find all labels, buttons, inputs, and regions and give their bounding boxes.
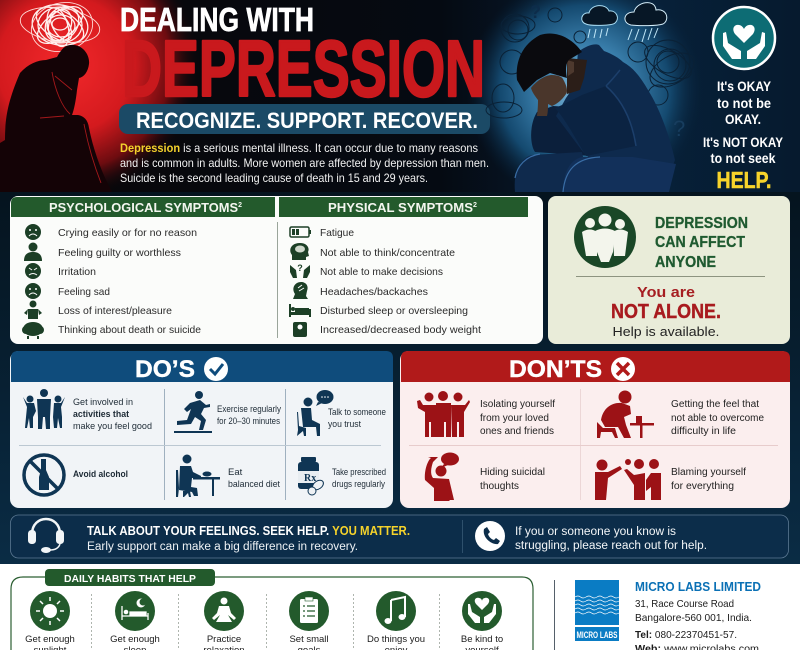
don't: isolating: Isolating yourself (480, 399, 555, 410)
hero banner (0, 0, 800, 193)
list: physical symptoms: Not able to make decisions (320, 266, 443, 278)
do: exercise: Exercise regularly (217, 404, 281, 414)
habit: kind to yourself (461, 591, 503, 650)
don't: isolating: ones and friends (480, 426, 554, 437)
illustration: man holding head with thought scribbles (486, 2, 700, 192)
heading: do's: DO’S (135, 356, 195, 383)
don't: hiding thoughts: Hiding suicidal (480, 467, 545, 478)
icon: bed (289, 304, 311, 317)
panel: daily habits (11, 569, 533, 650)
don't: blaming yourself (595, 459, 746, 500)
list: physical symptoms: Not able to think/concentrate (320, 247, 455, 259)
do: prescribed drugs: Take prescribed (332, 467, 386, 477)
do: activities (23, 389, 152, 432)
message: it's okay: to not seek (710, 150, 776, 166)
man's legs (515, 152, 590, 192)
icon: guilty person (24, 242, 42, 261)
illustration: man holding head with thought scribbles: ? (530, 2, 541, 22)
man's face (567, 58, 587, 94)
text: reach out: If you or someone you know is (515, 526, 676, 538)
heading: don'ts: DON’TS (509, 356, 602, 383)
panel: can affect anyone (548, 196, 790, 344)
man's hair (517, 34, 582, 92)
footer background (0, 564, 800, 650)
list: psychological symptoms: Feeling sad (58, 286, 110, 298)
text: you are not alone: Help is available. (612, 324, 720, 339)
list: physical symptoms: Fatigue (320, 227, 354, 239)
message: it's okay: HELP. (716, 167, 772, 193)
text: you are not alone (611, 284, 721, 339)
heading: physical symptoms (279, 197, 528, 217)
heading: psychological symptoms: PSYCHOLOGICAL SYMPTOMS (49, 200, 240, 215)
man's far arm (531, 106, 592, 156)
heading: psychological symptoms (11, 197, 275, 217)
heading: psychological symptoms: 2 (238, 202, 242, 209)
heading: do's (11, 351, 393, 383)
habit: relaxation: Practice (207, 634, 241, 645)
message: it's okay: It's OKAY (717, 78, 772, 94)
heading: daily habits (45, 569, 215, 586)
cloud left (582, 6, 617, 25)
heading: don'ts (401, 351, 790, 383)
text: seek help: Early support can make a big difference in recovery. (87, 541, 358, 553)
panel: do's (10, 351, 393, 508)
icon: weighing scale (293, 322, 307, 337)
contact details: MICRO LABS LIMITED (635, 580, 761, 594)
do: exercise (174, 391, 281, 433)
do: prescribed drugs: Rx (304, 473, 316, 484)
icon: headache (293, 282, 308, 299)
message: it's okay (703, 78, 784, 193)
icon: hands with question mark: ? (297, 263, 303, 273)
habit: enjoy: Do things you (367, 634, 425, 645)
panel: don'ts (400, 351, 790, 508)
don't: isolating (417, 391, 555, 437)
do: exercise: for 20–30 minutes (217, 416, 280, 426)
text: seek help (87, 524, 410, 553)
list: physical symptoms: Increased/decreased body weight (320, 324, 481, 336)
illustration: man holding head with thought scribbles: ? (673, 116, 685, 141)
title: DEALING WITH (120, 1, 314, 38)
habit: sunlight: Get enough (25, 634, 75, 645)
list: physical symptoms: Disturbed sleep or oversleeping (320, 305, 468, 317)
do: talk to someone: Talk to someone (328, 407, 386, 417)
do: activities: Get involved in (73, 397, 133, 408)
icon: crying face (25, 224, 41, 240)
don't: hiding thoughts: thoughts (480, 481, 519, 492)
icon: irritated face (25, 263, 41, 279)
message: it's okay: OKAY. (725, 111, 761, 127)
icon: dark cloud (22, 322, 44, 339)
don't: overcome difficulty: difficulty in life (671, 426, 736, 437)
icon: group of people (574, 206, 636, 268)
habit: sunlight (25, 591, 75, 650)
do: activities: activities that (73, 409, 130, 420)
list: physical symptoms (289, 227, 481, 337)
do: avoid alcohol (24, 455, 128, 495)
list: psychological symptoms: Loss of interest/pleasure (58, 305, 172, 317)
icon: hands with question mark (290, 263, 310, 278)
message: it's okay: to not be (717, 95, 771, 111)
cloud right (625, 3, 667, 26)
habit: enjoy (367, 591, 425, 650)
do: activities: make you feel good (73, 421, 152, 432)
do: prescribed drugs: drugs regularly (332, 479, 385, 489)
list: psychological symptoms: Irritation (58, 266, 96, 278)
icon: sad face (25, 283, 41, 299)
habit: relaxation (203, 591, 245, 650)
don't: overcome difficulty: Getting the feel that (671, 399, 759, 410)
heading: daily habits: DAILY HABITS THAT HELP (64, 573, 196, 585)
text: depression can affect anyone (655, 215, 748, 271)
heading: physical symptoms: PHYSICAL SYMPTOMS (328, 200, 471, 215)
habit: kind to yourself: Be kind to (461, 634, 503, 645)
intro text: and is common in adults. More women are affected by depression than men. (120, 156, 489, 170)
do: balanced diet: balanced diet (228, 479, 280, 490)
text: depression can affect anyone: ANYONE (655, 254, 716, 271)
do: prescribed drugs (298, 457, 386, 495)
do: talk to someone (297, 390, 386, 436)
contact details: 31, Race Course Road (635, 598, 734, 610)
logo: micro labs: MICRO LABS (576, 630, 618, 640)
text: seek help: TALK ABOUT YOUR FEELINGS. SEEK HELP. YOU MATTER. (87, 524, 410, 538)
text: depression can affect anyone: DEPRESSION (655, 215, 748, 232)
icon: person shrugging (24, 300, 42, 319)
do: avoid alcohol: Avoid alcohol (73, 469, 128, 480)
list: psychological symptoms: Feeling guilty or worthless (58, 247, 181, 259)
do: talk to someone: you trust (328, 419, 361, 429)
don't: overcome difficulty: not able to overcome (671, 413, 764, 424)
knee highlight (515, 154, 600, 192)
text: you are not alone: You are (637, 284, 695, 301)
icon: phone (475, 521, 505, 551)
man's torso (556, 44, 675, 182)
don't: overcome difficulty (597, 390, 764, 438)
habit: small goals: Set small (289, 634, 329, 645)
don't: isolating: from your loved (480, 413, 549, 424)
icon: caring hands with heart (713, 7, 775, 69)
man's hands (531, 75, 567, 116)
list: psychological symptoms: Thinking about death or suicide (58, 324, 201, 336)
banner: talk about your feelings (10, 515, 788, 558)
don't: blaming yourself: for everything (671, 481, 734, 492)
contact details: Bangalore-560 001, India. (635, 612, 752, 624)
text: depression can affect anyone: CAN AFFECT (655, 234, 745, 251)
heading: physical symptoms: 2 (473, 202, 477, 209)
intro text: Depression is a serious mental illness. It can occur due to many reasons (120, 141, 478, 155)
don't: hiding thoughts (425, 452, 545, 501)
tagline pill: RECOGNIZE. SUPPORT. RECOVER. (136, 108, 478, 133)
panel: symptoms (10, 196, 543, 344)
logo: micro labs (575, 580, 619, 641)
title: depression: DEPRESSION (122, 24, 485, 113)
contact details: Tel: 080-22370451-57. (635, 629, 737, 641)
icon: headset (28, 519, 64, 553)
message: it's okay: It's NOT OKAY (703, 134, 784, 150)
man's near arm (555, 86, 636, 156)
list: psychological symptoms: Crying easily or for no reason (58, 227, 197, 239)
intro text (120, 141, 489, 185)
do: balanced diet: Eat (228, 467, 243, 478)
list: physical symptoms: Headaches/backaches (320, 286, 428, 298)
icon: low battery (290, 227, 311, 237)
habit: small goals (289, 591, 329, 650)
contact details (635, 580, 761, 650)
illustration: stressed silhouette with scribble (0, 0, 112, 192)
list: psychological symptoms (22, 224, 201, 339)
intro text: Suicide is the second leading cause of death in 15 and 29 years. (120, 171, 428, 185)
habit: sleep (110, 591, 160, 650)
text: you are not alone: NOT ALONE. (611, 301, 721, 323)
text: reach out (515, 526, 707, 552)
text: reach out: struggling, please reach out for help. (515, 540, 707, 552)
habit: sleep: Get enough (110, 634, 160, 645)
icon: head with brain (290, 243, 309, 260)
don't: blaming yourself: Blaming yourself (671, 467, 746, 478)
do: balanced diet (176, 454, 280, 497)
